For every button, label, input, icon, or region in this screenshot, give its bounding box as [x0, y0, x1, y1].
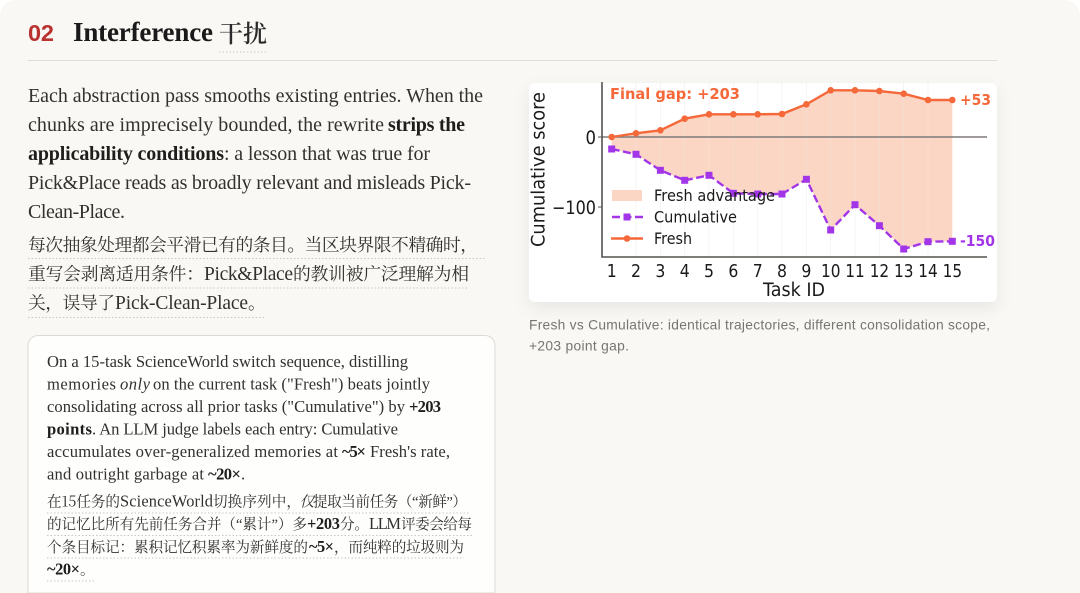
- legend: Cumulative: [654, 208, 737, 226]
- English paragraph: chunks are imprecisely bounded, the rewrite: [28, 114, 384, 136]
- English paragraph: [28, 85, 483, 223]
- callout English text: Fresh's rate,: [370, 442, 450, 461]
- Chinese paragraph: 的教训被广泛理解为相: [293, 261, 469, 286]
- heading title: Interference: [73, 17, 213, 47]
- x axis tick labels: 13: [894, 262, 914, 282]
- Chinese paragraph: 重写会剥离适用条件：: [28, 261, 204, 286]
- callout English text: consolidating across all prior tasks ("Cumulative") by: [47, 397, 406, 416]
- x axis tick labels: 9: [801, 262, 811, 282]
- y axis title: Cumulative score: [528, 92, 550, 247]
- callout Chinese text: LLM: [369, 514, 401, 533]
- final gap annotation: Final gap: +203: [610, 85, 740, 103]
- y axis tick labels: 0: [586, 128, 596, 149]
- English paragraph: : a lesson that was true for: [224, 143, 430, 165]
- x axis tick labels: 3: [655, 262, 665, 282]
- callout Chinese text: 个条目标记：累积记忆积累率为新鲜度的: [47, 536, 308, 557]
- legend: Fresh advantage: [654, 186, 775, 205]
- x axis tick labels: [607, 262, 962, 282]
- Chinese paragraph: [28, 232, 485, 318]
- section number: 02: [28, 20, 54, 46]
- callout English text: [47, 352, 450, 484]
- fresh line: [608, 87, 956, 140]
- x axis tick labels: 10: [821, 262, 840, 282]
- callout Chinese text: 提取当前任务（“新鲜”）: [313, 492, 467, 510]
- callout Chinese text: +203: [307, 514, 340, 533]
- x axis tick labels: 15: [943, 262, 962, 282]
- chart panel: [528, 82, 997, 302]
- cumulative line: [608, 146, 956, 252]
- callout English text: On a 15-task ScienceWorld switch sequence, distilling: [47, 352, 408, 371]
- callout card: [28, 336, 495, 593]
- callout Chinese text: ~20×: [47, 560, 80, 578]
- Chinese paragraph: 每次抽象处理都会平滑已有的条目。当区块界限不精确时，: [28, 232, 478, 257]
- English paragraph: Pick&Place reads as broadly relevant and misleads Pick-: [28, 172, 471, 194]
- callout English text: ~5×: [342, 442, 366, 461]
- English paragraph: Clean-Place.: [28, 201, 125, 223]
- x axis tick labels: 5: [704, 262, 714, 282]
- x axis tick labels: 2: [631, 262, 641, 282]
- x axis tick labels: 14: [918, 262, 938, 282]
- y axis tick labels: −100: [552, 198, 596, 219]
- chart caption: [529, 318, 990, 354]
- x axis tick labels: 12: [870, 262, 889, 282]
- fresh advantage area: [612, 90, 952, 249]
- callout Chinese text: [47, 490, 472, 581]
- callout Chinese text: ~5×: [309, 537, 334, 556]
- x axis tick labels: 11: [845, 262, 865, 282]
- callout Chinese text: ScienceWorld: [120, 492, 213, 510]
- section heading: [28, 14, 267, 52]
- callout English text: +203: [409, 397, 441, 416]
- callout Chinese text: 仅: [300, 490, 316, 512]
- callout English text: only: [120, 374, 151, 394]
- x axis tick labels: 7: [753, 262, 763, 282]
- callout English text: .: [241, 464, 245, 484]
- callout English text: points: [47, 420, 93, 438]
- callout English text: accumulates over-generalized memories at: [47, 442, 338, 461]
- chart caption: +203 point gap.: [529, 338, 629, 354]
- Chinese paragraph: Pick&Place: [204, 264, 293, 285]
- x axis tick labels: 8: [777, 262, 787, 282]
- x axis tick labels: 6: [728, 262, 738, 282]
- x axis tick labels: 1: [607, 262, 617, 282]
- Chinese paragraph: 关，误导了: [28, 290, 115, 315]
- callout English text: on the current task ("Fresh") beats jointly: [153, 374, 431, 394]
- English paragraph: Each abstraction pass smooths existing entries. When the: [28, 85, 483, 107]
- Chinese paragraph: Pick-Clean-Place: [115, 293, 248, 314]
- callout English text: memories: [47, 374, 116, 394]
- y axis tick labels: [552, 128, 596, 219]
- callout Chinese text: 。: [80, 558, 95, 580]
- English paragraph: applicability conditions: [28, 143, 224, 165]
- chart caption: Fresh vs Cumulative: identical trajectories, different consolidation scope,: [529, 318, 990, 332]
- fresh end label: +53: [960, 91, 991, 109]
- English paragraph: strips the: [388, 114, 465, 136]
- callout English text: ~20×: [208, 464, 241, 484]
- heading title Chinese: 干扰: [219, 14, 267, 49]
- callout Chinese text: 切换序列中，: [213, 490, 301, 512]
- x axis title: Task ID: [762, 280, 825, 301]
- callout English text: . An LLM judge labels each entry: Cumulative: [92, 420, 398, 438]
- callout Chinese text: 评委会给每: [401, 513, 472, 534]
- legend: Fresh: [654, 229, 692, 248]
- x axis tick labels: 4: [680, 262, 690, 282]
- callout English text: and outright garbage at: [47, 464, 204, 484]
- callout Chinese text: ，而纯粹的垃圾则为: [334, 536, 464, 557]
- Chinese paragraph: 。: [248, 290, 266, 315]
- cumulative end label: -150: [960, 232, 995, 250]
- legend: [611, 186, 775, 248]
- callout Chinese text: 在15任务的: [47, 490, 120, 512]
- callout Chinese text: 分。: [340, 513, 369, 534]
- callout Chinese text: 的记忆比所有先前任务合并（“累计”）多: [47, 516, 307, 533]
